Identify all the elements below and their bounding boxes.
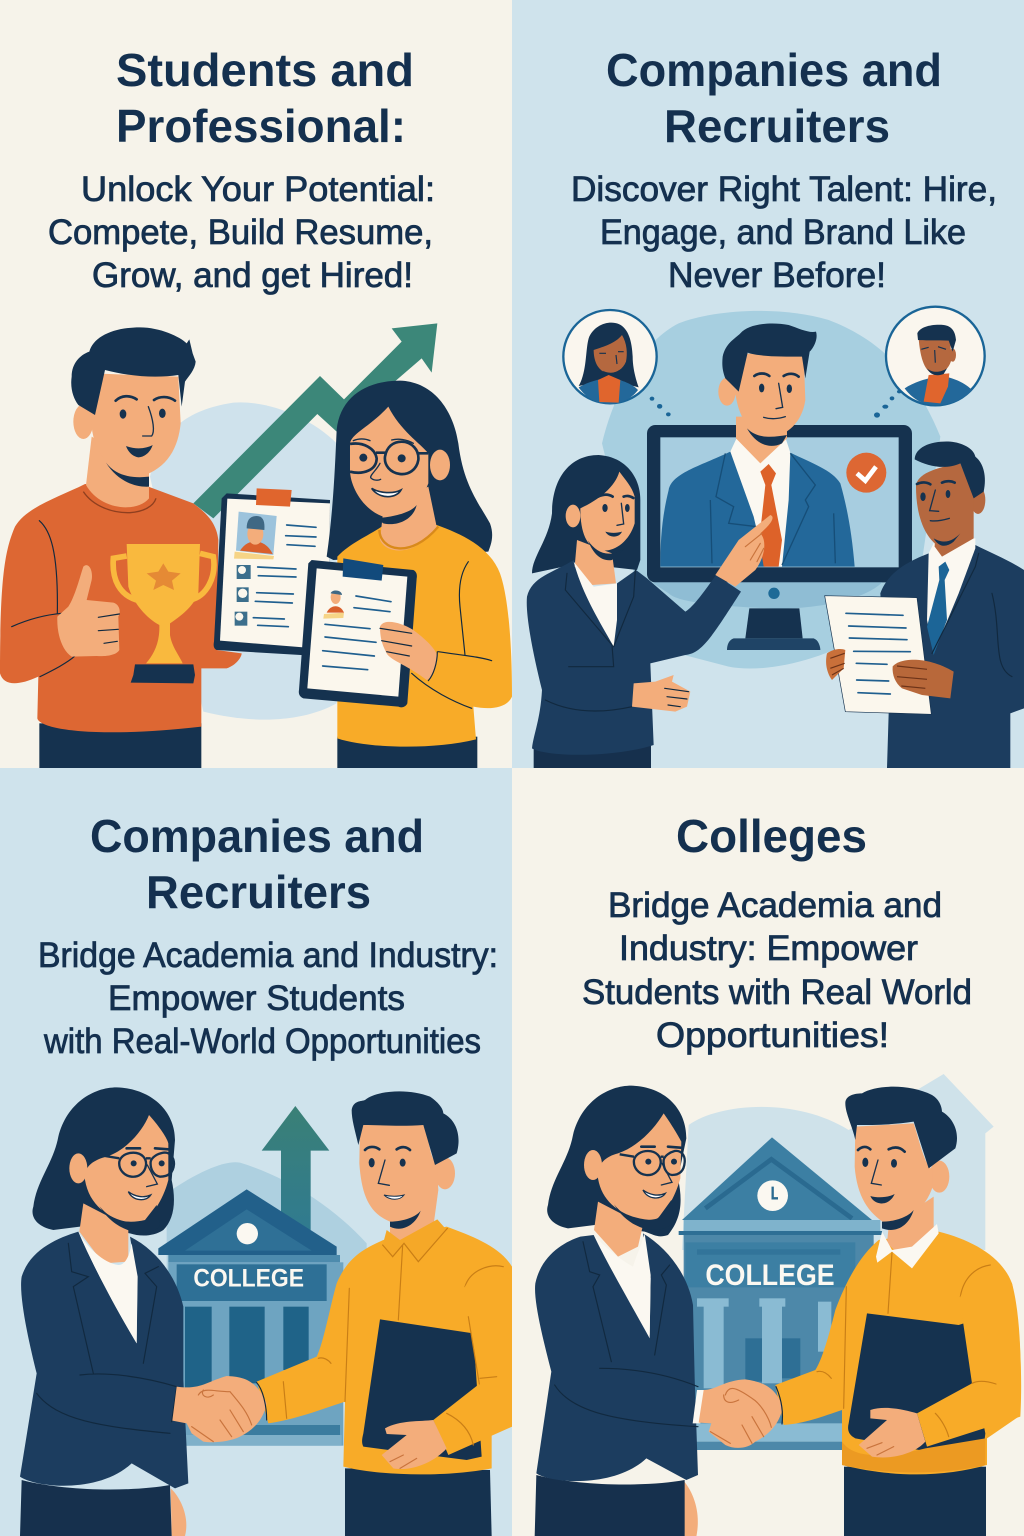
text block: students tagline	[48, 170, 435, 295]
heading: students and professional	[116, 44, 414, 152]
text block: students tagline: Compete, Build Resume,	[48, 213, 433, 252]
collar	[876, 1224, 939, 1268]
heading: companies and recruiters: Companies and	[606, 44, 942, 96]
panel: companies and recruiters, hiring	[512, 0, 1024, 768]
figure: candidate on screen	[660, 323, 855, 567]
hand: pointing	[715, 515, 773, 587]
text block: colleges tagline: Bridge Academia and	[608, 886, 942, 925]
monitor with video call	[647, 323, 912, 650]
hand: holding folder	[382, 1420, 447, 1469]
folder	[362, 1319, 482, 1460]
heading: companies and recruiters	[606, 44, 942, 152]
heading: students and professional: Professional:	[116, 100, 406, 152]
icon: thumbs up	[57, 565, 120, 657]
figure: man with white collar and folder	[775, 1087, 1021, 1536]
hand: holding clipboard	[380, 622, 437, 681]
text block: bridge academia tagline: Bridge Academia and Industry:	[38, 936, 498, 975]
illustration: recruiter handshake at college	[20, 1087, 512, 1536]
arrow: growth	[193, 323, 437, 518]
heading: companies and recruiters	[90, 810, 424, 918]
college building	[158, 1189, 343, 1446]
illustration: college handshake	[535, 1074, 1021, 1536]
panel: colleges	[512, 768, 1024, 1536]
text block: students tagline: Grow, and get Hired!	[92, 256, 413, 295]
text block: colleges tagline	[582, 886, 972, 1055]
hands: handshake	[172, 1376, 267, 1442]
heading: companies and recruiters: Recruiters	[664, 100, 890, 152]
college building: COLLEGE	[193, 1266, 304, 1293]
figure: woman with glasses	[535, 1086, 698, 1536]
heading: companies and recruiters: Recruiters	[146, 866, 371, 918]
illustration: students with trophy and resumes	[0, 323, 512, 768]
avatar: man candidate	[886, 307, 985, 405]
hand: open palm	[632, 675, 690, 712]
text block: discover talent tagline: Engage, and Brand Like	[600, 213, 966, 252]
heading: companies and recruiters: Companies and	[90, 810, 424, 862]
heading: students and professional: Students and	[116, 44, 414, 96]
college building	[679, 1137, 882, 1450]
college building: COLLEGE	[705, 1259, 835, 1292]
heading: colleges: Colleges	[676, 810, 867, 862]
figure: man with folder	[257, 1091, 512, 1536]
document: second resume clipboard	[299, 558, 437, 707]
text block: colleges tagline: Industry: Empower	[619, 929, 918, 968]
figure: woman recruiter	[527, 455, 773, 768]
panel: companies and recruiters, academia	[0, 768, 512, 1536]
text block: bridge academia tagline: Empower Students	[108, 979, 405, 1018]
illustration: video interview scene	[527, 307, 1024, 768]
avatar: woman candidate	[563, 310, 657, 404]
text block: discover talent tagline	[571, 170, 997, 295]
text block: discover talent tagline: Never Before!	[668, 256, 886, 295]
text block: students tagline: Unlock Your Potential:	[81, 170, 435, 209]
figure: woman with glasses	[20, 1087, 188, 1536]
connector dots	[650, 390, 902, 418]
figure: woman with glasses	[327, 381, 512, 768]
arrow: upward	[262, 1106, 329, 1247]
icon: trophy	[113, 544, 214, 683]
text block: discover talent tagline: Discover Right Talent: Hire,	[571, 170, 997, 209]
document: resume clipboard	[214, 488, 330, 657]
figure: man recruiter with document	[825, 442, 1024, 768]
icon: orange check badge	[846, 453, 886, 493]
text block: bridge academia tagline: with Real-World Opportunities	[43, 1022, 481, 1061]
hands: handshake	[693, 1379, 783, 1448]
text block: colleges tagline: Students with Real World	[582, 973, 972, 1012]
figure: man with trophy	[0, 327, 242, 768]
hand: right hand on paper	[826, 649, 954, 698]
document: paper	[825, 596, 931, 714]
text block: bridge academia tagline	[38, 936, 498, 1061]
folder	[848, 1313, 985, 1459]
panel: students and professional	[0, 0, 512, 768]
text block: colleges tagline: Opportunities!	[656, 1016, 889, 1055]
hand: holding folder	[859, 1408, 925, 1458]
